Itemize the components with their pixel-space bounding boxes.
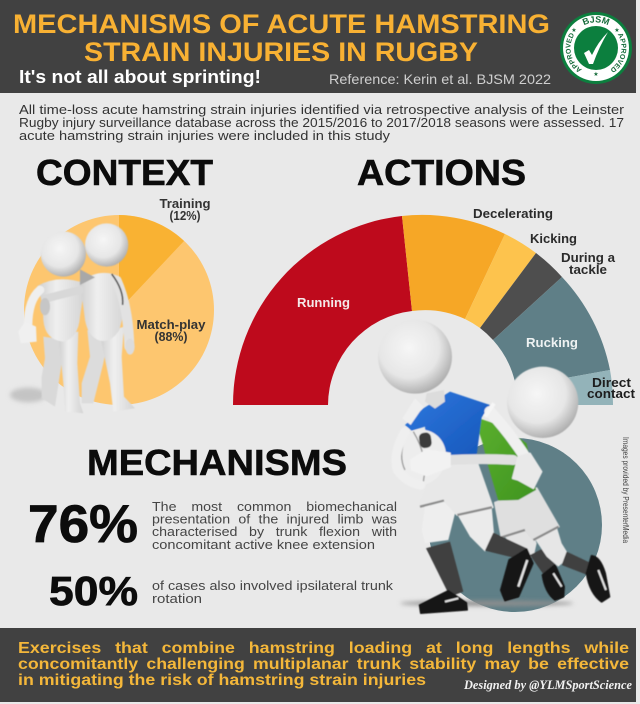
designer credit: Designed by @YLMSportScience [463, 677, 632, 692]
heading: mechanisms: MECHANISMS [87, 442, 347, 483]
pie chart: context [24, 215, 214, 405]
label: during a tackle: tackle [569, 262, 607, 277]
label: training [160, 196, 211, 223]
title: STRAIN INJURIES IN RUGBY [84, 37, 478, 67]
right figure outer arm [117, 281, 129, 347]
icon: BJSM approved badge: ★ [571, 27, 577, 34]
stat text: 76%: presentation of the injured limb was [152, 512, 398, 526]
chart: actions semi-circle [233, 215, 613, 405]
green player's shorts [495, 488, 559, 540]
intro text: All time-loss acute hamstring strain injuries identified via retrospective analysis of the Leinster [19, 102, 625, 117]
title: MECHANISMS OF ACUTE HAMSTRING [13, 9, 550, 39]
stat text: 76%: concomitant active knee extension [152, 537, 375, 552]
blue player's back leg [457, 507, 494, 552]
label: direct contact [587, 375, 636, 401]
green player's arm and hand [448, 444, 513, 475]
subtitle: It's not all about sprinting! [19, 67, 261, 87]
stat text: 76%: The most common biomechanical [152, 499, 397, 514]
heads [507, 367, 578, 438]
reference: Reference: Kerin et al. BJSM 2022 [329, 71, 551, 87]
blue player's right arm and hand [490, 412, 526, 458]
left figure legs [42, 337, 67, 407]
embracing arm [47, 290, 80, 298]
label: decelerating: Decelerating [473, 206, 553, 221]
intro text: acute hamstring strain injuries were included in this study [19, 128, 391, 143]
stat text: 50%: of cases also involved ipsilateral trunk [152, 578, 394, 593]
intro text [19, 102, 625, 143]
blue player's front leg [422, 502, 455, 543]
takeaway text [18, 640, 629, 689]
takeaway text: in mitigating the risk of hamstring strain injuries [18, 672, 426, 689]
label: rucking: Rucking [526, 335, 578, 350]
figures: two embracing 3D people [10, 223, 135, 413]
blue player's shorts [419, 462, 493, 515]
label: match-play: Match-play [136, 317, 206, 332]
icon: BJSM approved badge: ★ [593, 71, 599, 78]
stat: 50%: 50% [49, 568, 138, 614]
label: training: Training [160, 196, 211, 211]
neck [425, 390, 445, 409]
circle behind players [428, 438, 602, 612]
left figure arm and hand [28, 290, 40, 325]
stat text: 50% [152, 578, 394, 606]
stat text: 50%: rotation [152, 591, 202, 606]
icon: BJSM approved badge: APPROVED [566, 33, 582, 72]
label: training: (12%) [170, 208, 200, 223]
header band [0, 0, 636, 93]
left figure torso [37, 279, 85, 342]
blue player's arms [396, 432, 421, 485]
stat text: 76%: characterised by trunk flexion with [152, 524, 397, 539]
right figure legs [82, 330, 108, 403]
heading: context: CONTEXT [36, 152, 213, 193]
label: direct contact: contact [587, 386, 636, 401]
takeaway text: Exercises that combine hamstring loading at long lengths while [18, 640, 629, 657]
label: during a tackle: During a [561, 250, 616, 265]
icon: BJSM approved badge [560, 12, 632, 84]
intro text: Rugby injury surveillance database across the 2015/2016 to 2017/2018 seasons were assessed. 17 [19, 115, 624, 130]
icon: BJSM approved badge: ★ [614, 27, 620, 34]
label: running: Running [297, 295, 350, 310]
footer band [0, 628, 636, 702]
right figure torso [79, 273, 125, 341]
label: match-play [136, 317, 206, 344]
title [13, 9, 550, 67]
stat text: 76% [152, 499, 398, 552]
image credit: Images provided by PresenterMedia [621, 437, 630, 543]
rugby ball [387, 423, 453, 492]
label: kicking: Kicking [530, 231, 577, 246]
heads [85, 223, 128, 267]
blue shirt [405, 392, 490, 463]
label: direct contact: Direct [592, 375, 632, 390]
label: match-play: (88%) [154, 329, 188, 344]
green player's legs [502, 527, 537, 558]
takeaway text: concomitantly challenging multiplanar trunk stability may be effective [18, 656, 629, 673]
icon: BJSM approved badge: APPROVED [611, 34, 626, 72]
icon: BJSM approved badge: BJSM [582, 16, 610, 25]
heading: actions: ACTIONS [357, 152, 526, 193]
figures: rugby tackle [378, 320, 609, 613]
stat: 76%: 76% [28, 495, 138, 554]
green shirt [474, 417, 536, 501]
label: during a tackle [561, 250, 616, 277]
